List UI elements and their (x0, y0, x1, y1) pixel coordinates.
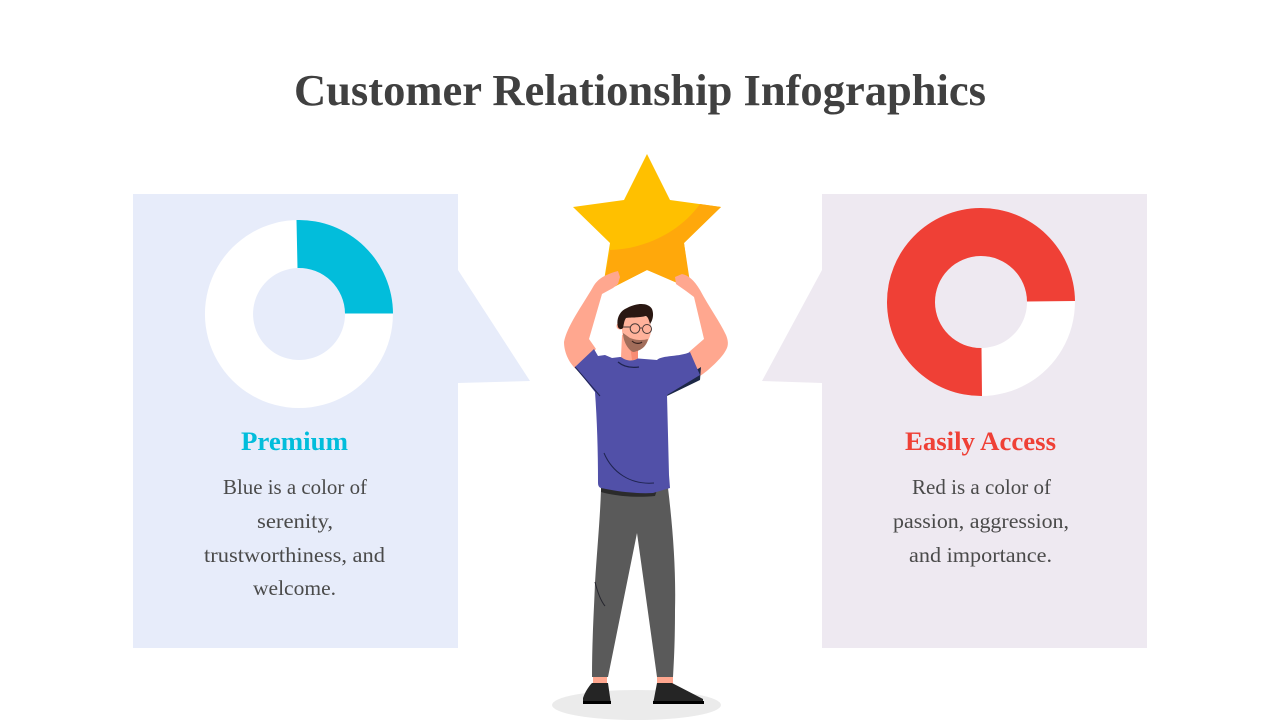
text block: easily access description: and importance. (909, 543, 1052, 567)
icon: ground shadow (552, 690, 721, 720)
text block: easily access description: Red is a color of (912, 475, 1051, 499)
right arm and hand (675, 274, 728, 376)
panel: premium (133, 194, 530, 648)
text block: premium description (204, 475, 386, 600)
heading: easily access: Easily Access (905, 427, 1056, 456)
shirt shadow (667, 367, 701, 396)
speech panel background: easily access (762, 194, 1147, 648)
glasses (623, 324, 652, 334)
ankles (593, 675, 673, 684)
shirt (575, 349, 700, 493)
text block: premium description: serenity, (257, 509, 333, 533)
heading: premium: Premium (241, 427, 348, 456)
text block: premium description: welcome. (253, 576, 336, 600)
text block: easily access description: passion, aggression, (893, 509, 1069, 533)
text block: premium description: Blue is a color of (223, 475, 367, 499)
text block: easily access description (893, 475, 1069, 567)
hair (617, 304, 653, 329)
illustration: person holding star (564, 271, 728, 704)
beard (623, 333, 648, 352)
trousers (592, 488, 675, 677)
icon: star (573, 154, 721, 293)
text block: premium description: trustworthiness, and (204, 543, 386, 567)
donut chart: easily access (887, 208, 1075, 396)
left arm and hand (564, 271, 620, 369)
head (616, 304, 653, 352)
panel: easily access (762, 194, 1147, 648)
speech panel background: premium (133, 194, 530, 648)
title: Customer Relationship Infographics (294, 66, 986, 115)
trouser crease (595, 582, 605, 606)
shoes (583, 683, 704, 704)
donut chart: premium (205, 220, 393, 408)
neck (621, 335, 638, 361)
belt (601, 488, 657, 497)
shirt creases (575, 367, 654, 483)
collar (618, 362, 639, 367)
